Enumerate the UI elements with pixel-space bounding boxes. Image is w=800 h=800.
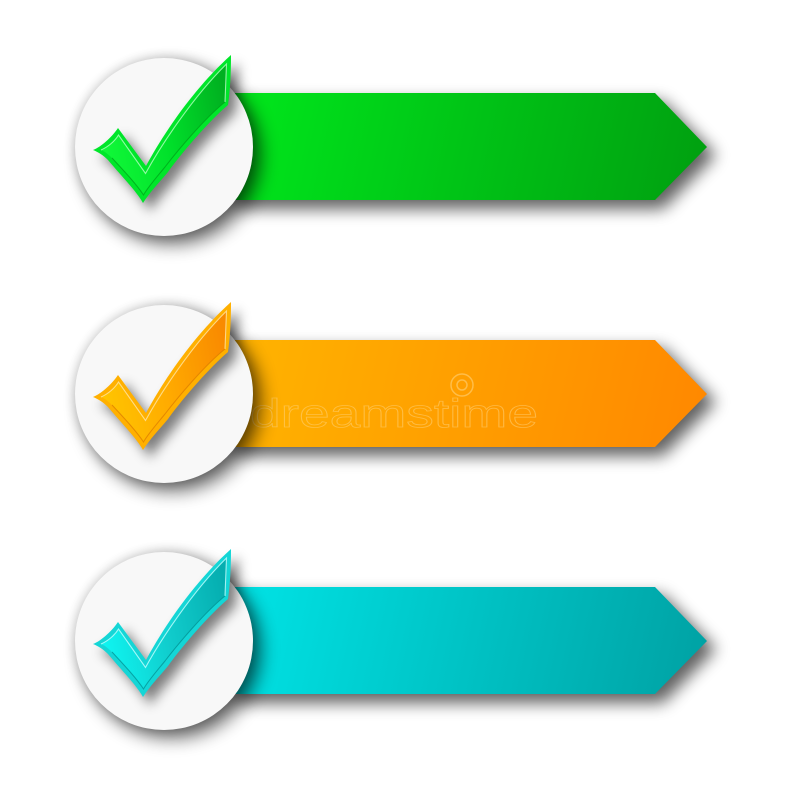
row: orange banner [73, 302, 716, 491]
banner shadow: teal [236, 595, 716, 703]
icon: green check mark [93, 55, 238, 211]
banner shadow: orange [236, 348, 716, 456]
icon: orange check mark [93, 302, 238, 458]
circle badge: green row [73, 56, 261, 244]
circle badge: orange row [73, 303, 261, 491]
arrow banner: green [230, 93, 707, 200]
row: green banner [73, 55, 716, 244]
arrow banner: teal [230, 587, 707, 694]
icon: teal check mark [93, 549, 238, 705]
row: teal banner [73, 549, 716, 738]
circle badge: teal row [73, 550, 261, 738]
arrow banner: orange [230, 340, 707, 447]
watermark text [250, 374, 538, 436]
watermark text: dreamstime [250, 392, 538, 436]
banner shadow: green [236, 101, 716, 209]
